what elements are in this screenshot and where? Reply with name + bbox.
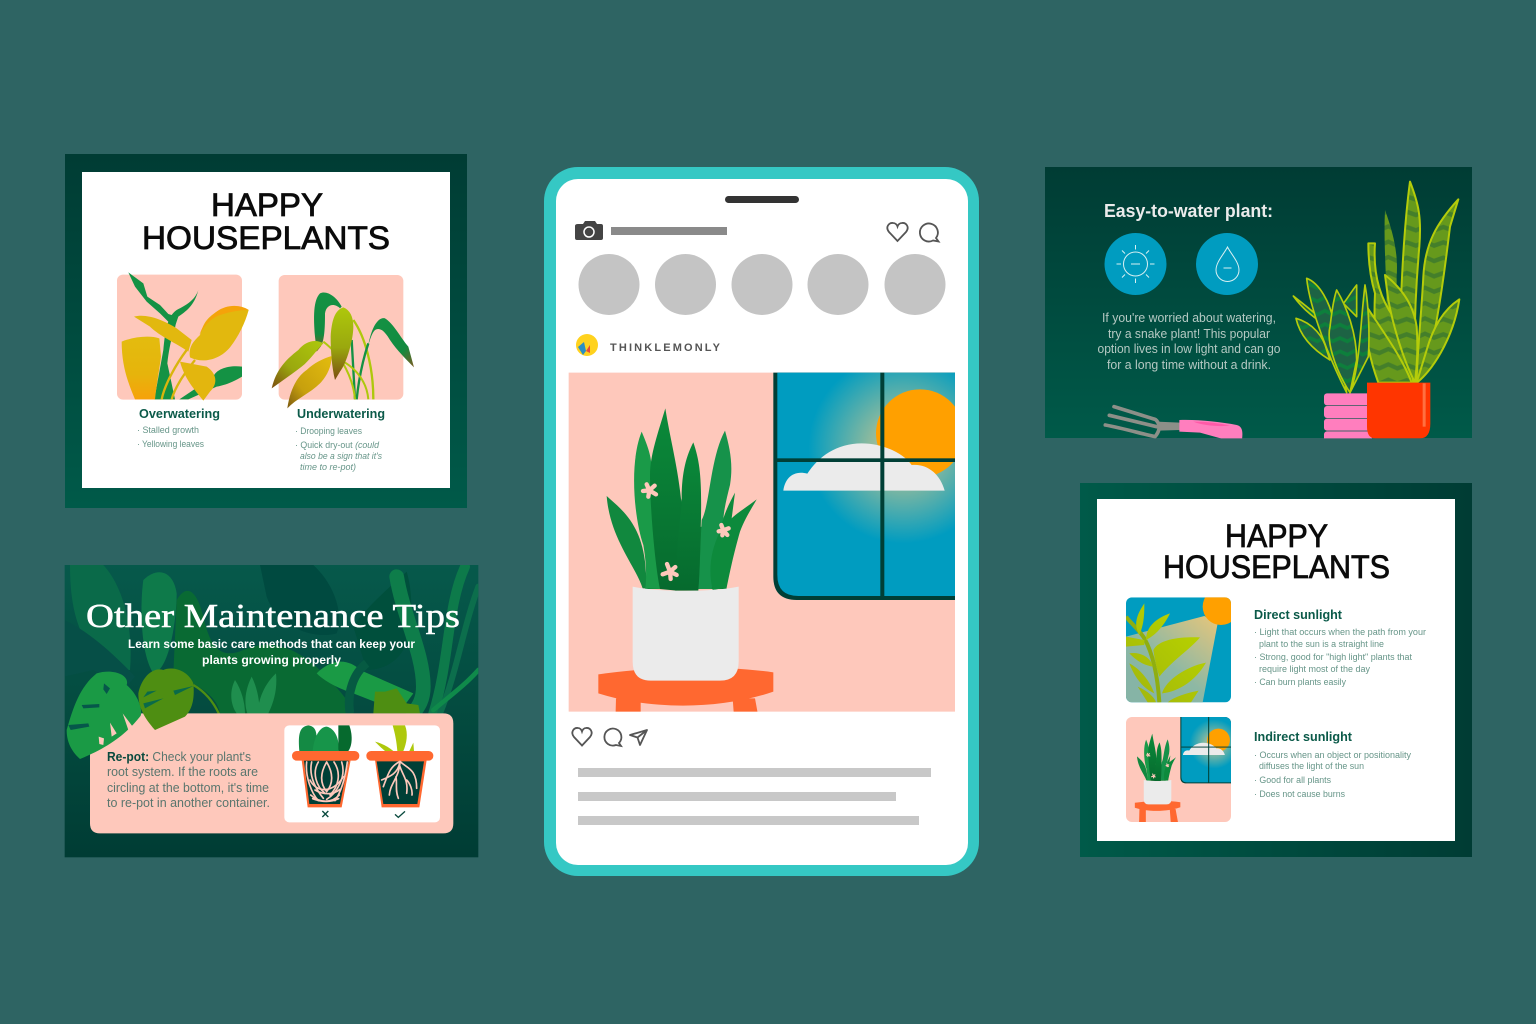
heading: happy houseplants: HAPPY [1225, 518, 1328, 554]
icon: water drop [1196, 233, 1258, 295]
illustration: direct sunlight [1126, 597, 1231, 702]
icon: share [630, 730, 647, 745]
text: direct sunlight [1254, 607, 1426, 687]
garden fork [1105, 407, 1242, 440]
text: snake plant description [1098, 310, 1280, 372]
icon: monstera leaf [67, 672, 141, 759]
icon: cross mark [322, 811, 328, 817]
subheading [128, 637, 415, 667]
icon: healthy pot [366, 725, 433, 807]
illustration: indirect sunlight [1126, 717, 1231, 822]
profile name bar [611, 227, 727, 235]
phone body [544, 167, 979, 876]
icon: like [572, 728, 592, 746]
text: re-pot advice [107, 749, 270, 810]
pink stacked pot [1324, 393, 1372, 443]
text: direct sunlight: · Light that occurs when the path from your [1254, 627, 1426, 637]
subheading: plants growing properly [202, 653, 341, 667]
text: snake plant description: for a long time without a drink. [1107, 357, 1271, 372]
text: re-pot advice: Re-pot: Check your plant's [107, 749, 251, 764]
text: re-pot advice: to re-pot in another container. [107, 795, 270, 810]
heading: happy houseplants: HAPPY [211, 187, 323, 223]
card white sheet [82, 172, 450, 488]
text: overwatering: · Stalled growth [137, 425, 199, 435]
heading: happy houseplants [1163, 518, 1390, 585]
text: overwatering: Overwatering [139, 407, 220, 421]
text: direct sunlight: plant to the sun is a straight line [1259, 639, 1384, 649]
illustration: overwatered plant [117, 272, 249, 401]
panel: phone mockup [544, 167, 979, 876]
icon: camera [575, 221, 603, 240]
phone screen [556, 179, 968, 865]
text: snake plant description: If you're worried about watering, [1102, 310, 1276, 325]
text: indirect sunlight [1254, 729, 1411, 799]
text: direct sunlight: Direct sunlight [1254, 607, 1343, 622]
text: overwatering: · Yellowing leaves [137, 439, 204, 449]
heading: happy houseplants: HOUSEPLANTS [1163, 549, 1390, 585]
panel: easy-to-water plant card [1045, 167, 1472, 443]
text: indirect sunlight: Indirect sunlight [1254, 729, 1353, 744]
panel: sunlight card [1080, 483, 1472, 857]
text: underwatering: also be a sign that it's [300, 451, 382, 461]
card frame [1080, 483, 1472, 857]
text: snake plant description: try a snake plant! This popular [1108, 326, 1271, 341]
subheading: Learn some basic care methods that can keep your [128, 637, 415, 651]
card background [1045, 167, 1472, 438]
text: re-pot advice: root system. If the roots are [107, 764, 258, 779]
card frame [65, 154, 467, 508]
icon: check mark [395, 811, 405, 817]
text: underwatering: · Drooping leaves [295, 426, 362, 436]
story circles [578, 254, 946, 315]
text: direct sunlight: require light most of the day [1259, 664, 1370, 674]
text: overwatering [137, 407, 220, 449]
text: underwatering: time to re-pot) [300, 462, 356, 472]
text: underwatering [295, 407, 385, 472]
heading: happy houseplants: HOUSEPLANTS [142, 220, 390, 256]
logo: thinklemonly [576, 334, 598, 356]
icon: root-bound pot [292, 725, 359, 807]
text: underwatering: Underwatering [297, 407, 385, 421]
card background with jungle leaves [64, 565, 478, 857]
heading: happy houseplants [142, 187, 390, 256]
icon: comment bubble [920, 224, 938, 242]
heading: other maintenance tips: Other Maintenance Tips [86, 598, 460, 635]
account name: THINKLEMONLY [610, 342, 721, 354]
panel: overwatering and underwatering card [65, 154, 467, 508]
card white sheet [1097, 499, 1455, 841]
snake plant in pink pot [1293, 278, 1369, 393]
caption bars [578, 768, 931, 825]
text: snake plant description: option lives in low light and can go [1098, 341, 1280, 356]
illustration: underwatered plant [272, 275, 414, 408]
text: indirect sunlight: diffuses the light of the sun [1259, 761, 1364, 771]
text: indirect sunlight: · Does not cause burns [1254, 789, 1345, 799]
heading: easy-to-water plant: Easy-to-water plant: [1104, 201, 1273, 221]
icon: heart [887, 223, 908, 241]
phone speaker [725, 196, 799, 203]
snake plant in red pot [1366, 182, 1459, 383]
text: indirect sunlight: · Occurs when an object or positionality [1254, 750, 1411, 760]
text: direct sunlight: · Strong, good for "high light" plants that [1254, 652, 1412, 662]
text: underwatering: · Quick dry-out (could [295, 440, 380, 450]
text: re-pot advice: circling at the bottom, it's time [107, 780, 269, 795]
illustration: plant on stool by window [568, 372, 955, 712]
icon: sun [1104, 233, 1166, 295]
icon: comment [604, 729, 621, 746]
panel: other maintenance tips card [64, 565, 478, 857]
text: indirect sunlight: · Good for all plants [1254, 775, 1331, 785]
icon: small monstera leaf [138, 669, 194, 730]
illustration: root comparison [284, 725, 440, 822]
red pot [1367, 383, 1430, 438]
text: direct sunlight: · Can burn plants easily [1254, 677, 1346, 687]
illustration: snake plants, pots and garden fork [1105, 182, 1459, 443]
